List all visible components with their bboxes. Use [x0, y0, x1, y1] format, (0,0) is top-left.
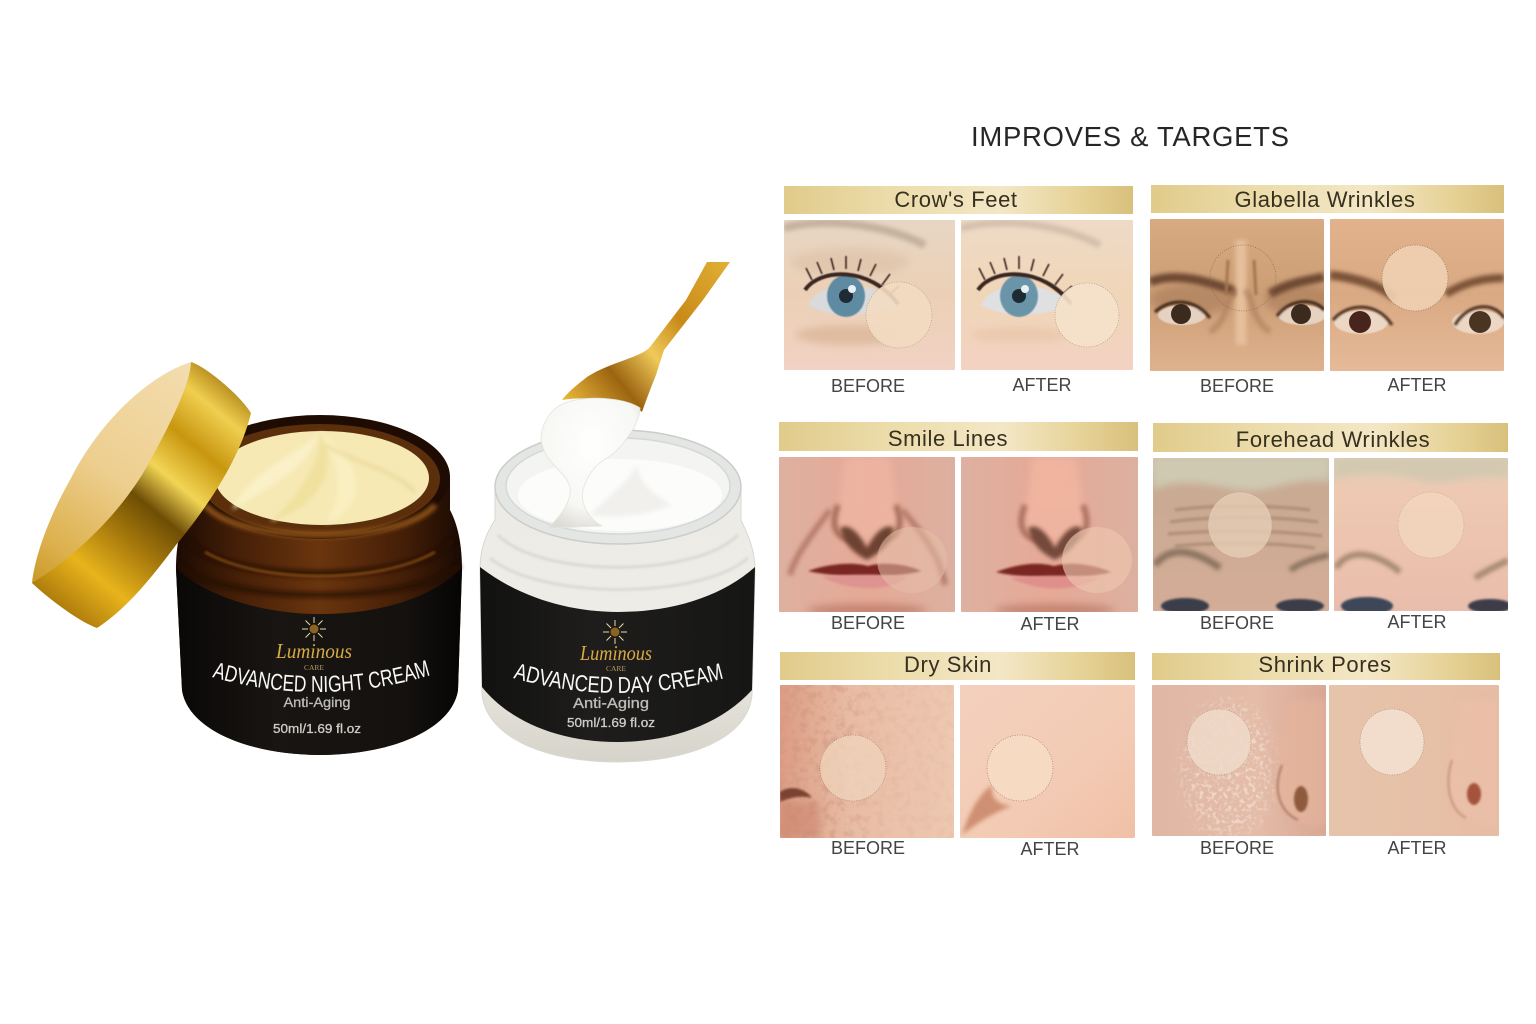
icon: gold sun logo [302, 617, 326, 641]
product group: night and day cream jars [32, 262, 756, 762]
panel: smile lines [779, 422, 1138, 634]
panel: shrink pores [1152, 652, 1500, 858]
photo: dry skin after [960, 685, 1135, 838]
treatment patch [1360, 709, 1424, 775]
heading bar: forehead wrinkles [1153, 423, 1508, 452]
heading bar: smile lines [779, 422, 1138, 451]
heading bar: forehead wrinkles: Forehead Wrinkles [1236, 427, 1430, 452]
heading bar: glabella wrinkles: Glabella Wrinkles [1235, 187, 1415, 212]
caption: AFTER [1387, 375, 1447, 395]
gold lid leaning on night jar [32, 362, 251, 628]
brand: Luminous Care [579, 641, 652, 673]
brand: Luminous Care: Luminous [579, 641, 652, 665]
panel: crow's feet [784, 186, 1133, 396]
photo: shrink pores after [1329, 685, 1499, 836]
brand: Luminous Care: CARE [606, 664, 626, 673]
brand: Luminous Care: Luminous [275, 639, 352, 663]
photo: crow's feet after [961, 220, 1133, 370]
panel: forehead wrinkles [1153, 423, 1512, 633]
photo: shrink pores before [1152, 685, 1326, 836]
caption: AFTER [1387, 612, 1447, 632]
panel: dry skin [780, 652, 1135, 859]
treatment patch [820, 735, 886, 801]
heading bar: dry skin: Dry Skin [904, 652, 992, 677]
white cream in jar [518, 459, 722, 531]
caption: BEFORE [1200, 838, 1274, 858]
treatment patch [987, 735, 1053, 801]
title: IMPROVES & TARGETS [971, 121, 1289, 152]
photo: forehead after [1334, 458, 1512, 615]
caption: BEFORE [831, 838, 905, 858]
subtitle: anti-aging: Anti-Aging [284, 695, 350, 710]
treatment patch [1062, 527, 1132, 593]
photo: smile lines after [961, 457, 1138, 616]
jar: advanced night cream [176, 415, 464, 755]
heading bar: shrink pores [1152, 652, 1500, 680]
caption: AFTER [1387, 838, 1447, 858]
caption: AFTER [1020, 614, 1080, 634]
heading bar: crow's feet [784, 186, 1133, 214]
photo: smile lines before [779, 457, 955, 616]
subtitle: anti-aging: Anti-Aging [573, 696, 649, 712]
icon: gold sun logo [603, 620, 627, 644]
volume: day cream: 50ml/1.69 fl.oz [567, 715, 655, 730]
photo: glabella before [1150, 219, 1335, 371]
treatment patch outline [1210, 245, 1276, 311]
treatment patch [1055, 283, 1119, 347]
treatment patch [1382, 245, 1448, 311]
volume: night cream: 50ml/1.69 fl.oz [273, 721, 361, 736]
photo: crow's feet before [784, 220, 955, 370]
product name: advanced day cream: ADVANCED DAY CREAM [513, 663, 723, 693]
caption: AFTER [1020, 839, 1080, 859]
treatment patch [1187, 709, 1251, 775]
photo: dry skin before [780, 685, 954, 838]
product name: advanced night cream: ADVANCED NIGHT CREAM [212, 660, 430, 692]
treatment patch [1398, 492, 1464, 558]
brand: Luminous Care: CARE [304, 663, 324, 672]
treatment patch [877, 527, 947, 593]
caption: BEFORE [1200, 376, 1274, 396]
treatment patch [1208, 492, 1272, 558]
brand: Luminous Care [275, 639, 352, 672]
label: day cream [480, 567, 755, 742]
heading bar: dry skin [780, 652, 1135, 680]
treatment patch [866, 282, 932, 348]
caption: BEFORE [831, 376, 905, 396]
jar: advanced day cream [480, 430, 756, 762]
caption: BEFORE [1200, 613, 1274, 633]
panel: glabella wrinkles [1150, 185, 1504, 396]
photo: glabella after [1330, 219, 1504, 371]
gold spoon with cream [541, 262, 730, 528]
heading bar: smile lines: Smile Lines [888, 426, 1008, 451]
label: night cream [176, 568, 462, 755]
caption: AFTER [1012, 375, 1072, 395]
heading bar: crow's feet: Crow's Feet [894, 187, 1018, 212]
heading bar: glabella wrinkles [1151, 185, 1504, 213]
photo: forehead before [1153, 458, 1329, 614]
caption: BEFORE [831, 613, 905, 633]
yellow cream swirl [215, 431, 429, 525]
heading bar: shrink pores: Shrink Pores [1258, 652, 1392, 677]
